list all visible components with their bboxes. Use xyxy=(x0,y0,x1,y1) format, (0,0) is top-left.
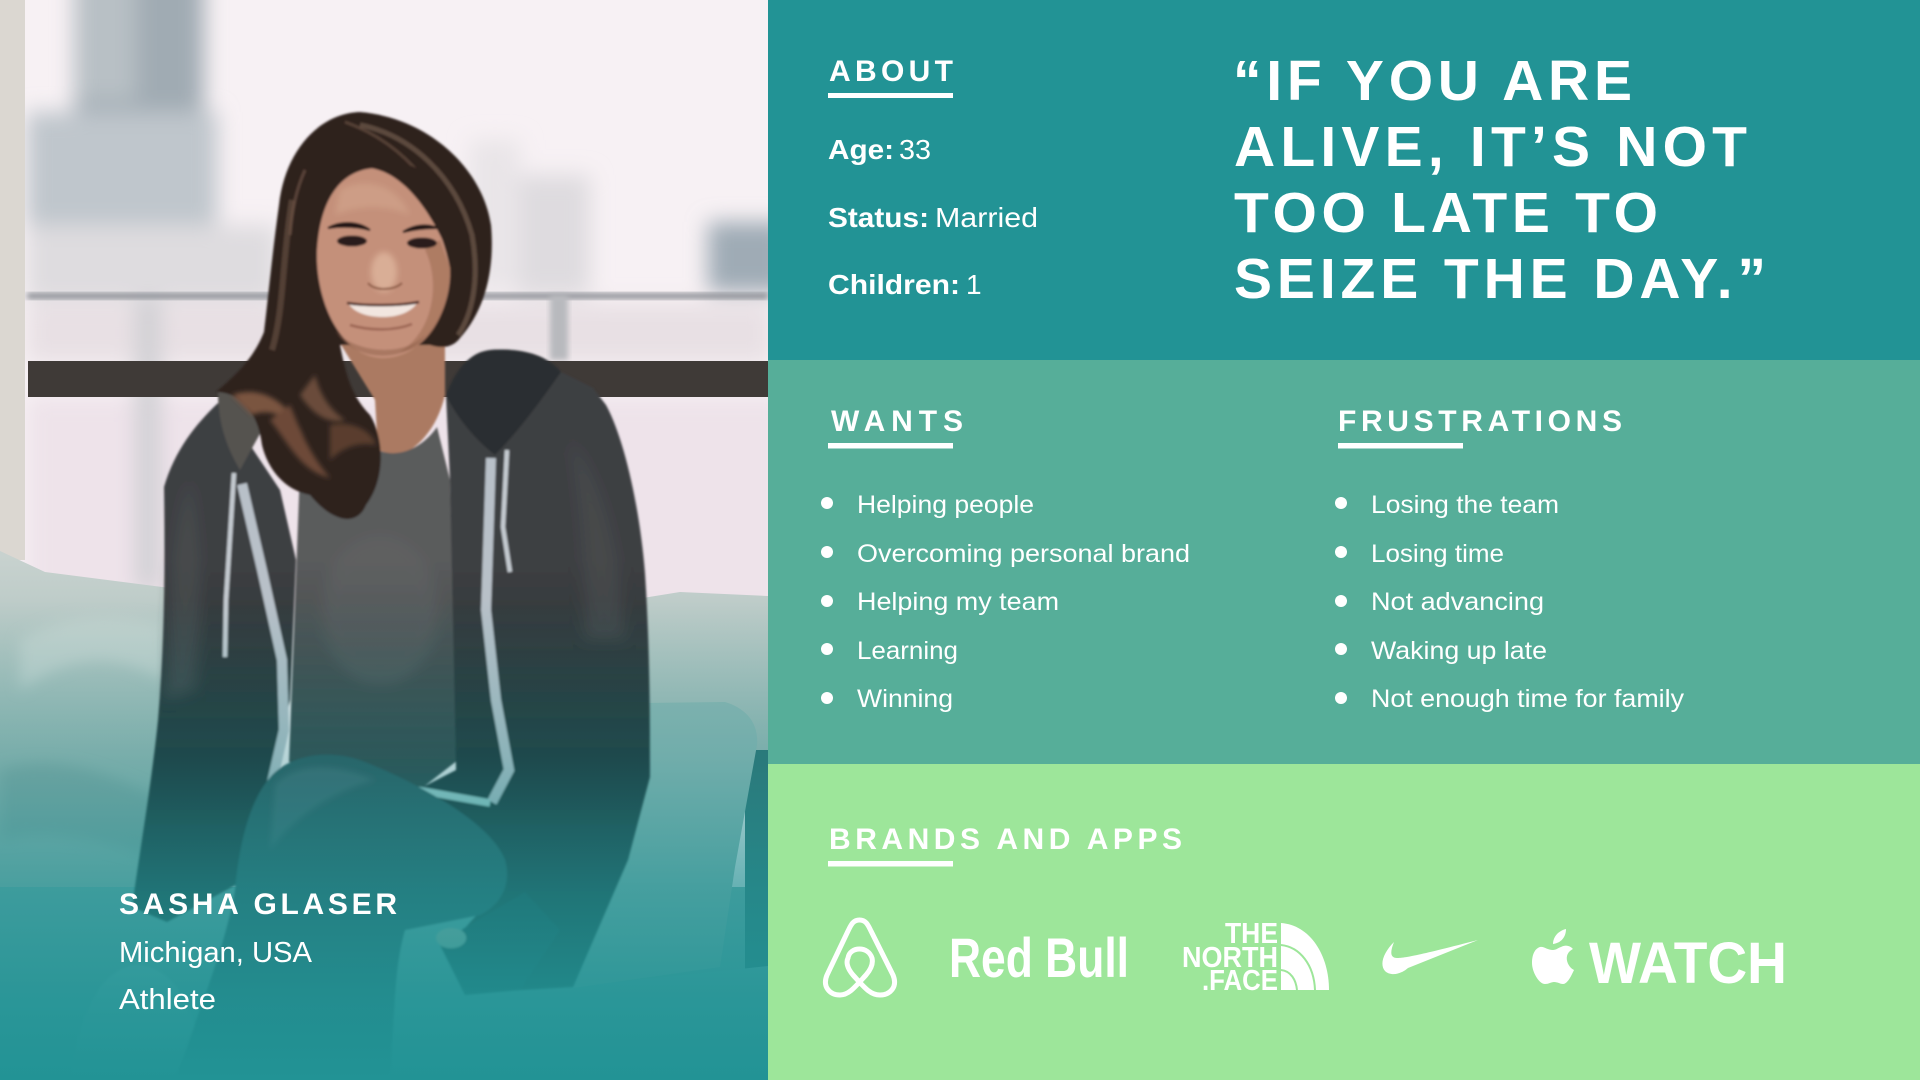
cuff and hand xyxy=(441,928,471,994)
status xyxy=(828,202,1038,233)
list: frustrations: Not advancing xyxy=(1371,588,1544,616)
location: Michigan, USA xyxy=(119,937,313,969)
tee xyxy=(289,427,458,792)
zip strips xyxy=(242,484,284,800)
brows, eyes, nose, mouth xyxy=(328,223,370,230)
other leg xyxy=(523,350,549,361)
hoodie right panel xyxy=(417,350,650,993)
tee highlight xyxy=(329,592,431,680)
heading: wants: WANTS xyxy=(831,405,963,438)
logo: The North Face: THE xyxy=(1225,918,1278,950)
occupation: Athlete xyxy=(119,984,216,1016)
heading: about: ABOUT xyxy=(829,55,953,88)
panel: brands and apps xyxy=(768,764,1920,1080)
icon: airbnb logo xyxy=(825,920,895,995)
name: Sasha Glaser: SASHA GLASER xyxy=(119,888,397,921)
list: frustrations: Waking up late xyxy=(1371,637,1547,665)
hair xyxy=(216,112,492,519)
panel: wants and frustrations xyxy=(768,360,1920,764)
logo: Red Bull: Red Bull xyxy=(949,926,1129,989)
logo: The North Face xyxy=(1182,918,1329,997)
hood collar left xyxy=(218,390,262,470)
quote: SEIZE THE DAY.” xyxy=(1234,247,1766,311)
heading: frustrations: FRUSTRATIONS xyxy=(1338,405,1622,438)
person xyxy=(132,110,652,1011)
panel: about and quote xyxy=(768,0,1920,360)
list: wants xyxy=(821,491,1190,713)
quote: TOO LATE TO xyxy=(1234,181,1658,245)
neck xyxy=(335,325,445,456)
hoodie highlights xyxy=(165,480,200,700)
children: 1 xyxy=(966,269,982,300)
list: wants: Learning xyxy=(857,637,958,665)
list: frustrations: Losing time xyxy=(1371,540,1504,568)
status: Married xyxy=(935,202,1038,233)
list: frustrations: Losing the team xyxy=(1371,491,1559,519)
list: wants: Overcoming personal brand xyxy=(857,540,1190,568)
age xyxy=(828,134,931,165)
list: wants: Helping my team xyxy=(857,588,1059,616)
list: frustrations: Not enough time for family xyxy=(1371,685,1685,713)
pillow xyxy=(614,702,757,900)
face xyxy=(317,168,450,358)
list: frustrations xyxy=(1335,491,1685,713)
children: Children: xyxy=(828,269,960,300)
logo: The North Face: .FACE xyxy=(1202,965,1278,997)
status: Status: xyxy=(828,202,929,233)
quote: “IF YOU ARE xyxy=(1233,49,1632,113)
leg xyxy=(202,755,507,1011)
quote: ALIVE, IT’S NOT xyxy=(1234,115,1747,179)
logo: The North Face: NORTH xyxy=(1182,942,1278,974)
icon: Nike swoosh xyxy=(1382,940,1478,974)
quote xyxy=(1233,49,1766,311)
teal gradient overlay xyxy=(0,600,768,1080)
age: 33 xyxy=(899,134,931,165)
list: wants: Helping people xyxy=(857,491,1034,519)
heading: brands and apps: BRANDS AND APPS xyxy=(829,823,1182,856)
sofa xyxy=(0,551,768,1080)
hoodie left panel xyxy=(132,403,296,922)
panel: portrait photo xyxy=(0,0,788,1080)
list: wants: Winning xyxy=(857,685,953,713)
logo: Apple Watch: WATCH xyxy=(1589,931,1787,996)
age: Age: xyxy=(828,134,894,165)
